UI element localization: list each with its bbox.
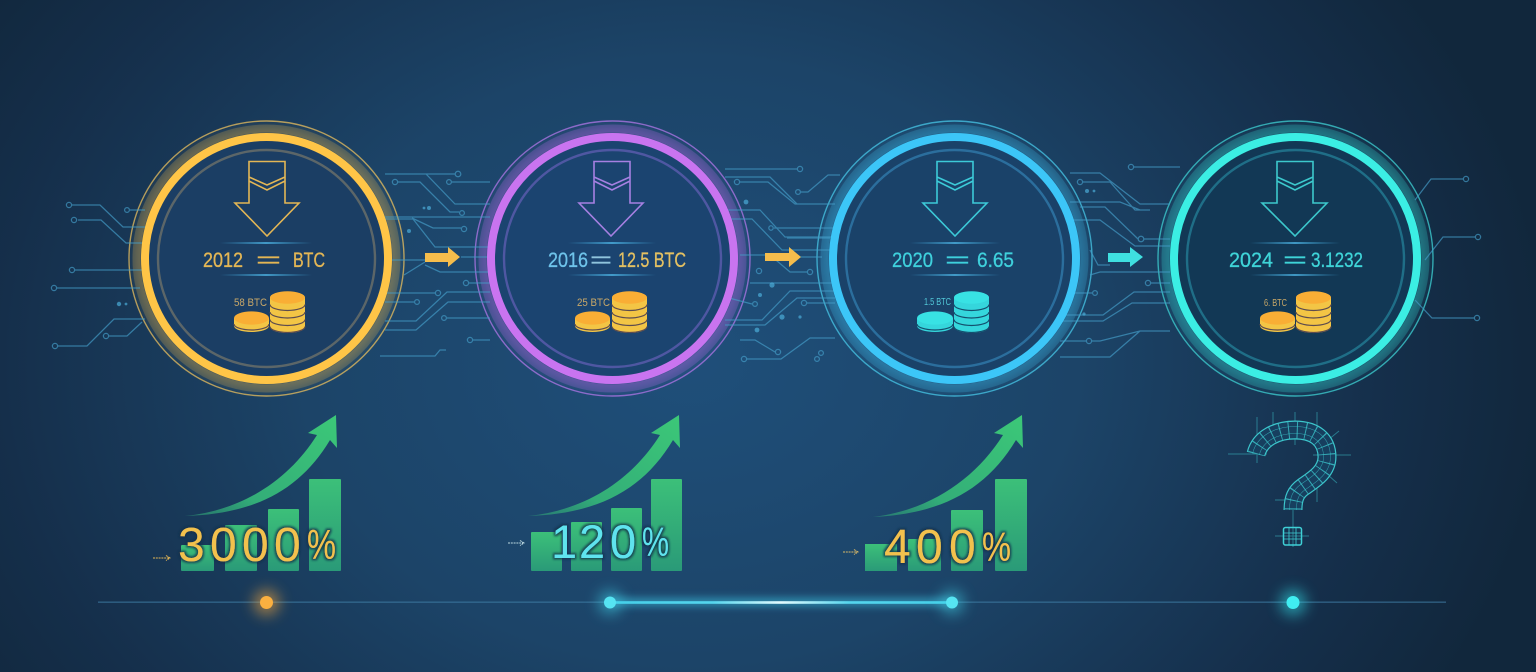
- label: 2016 = 12.5 BTC: =: [590, 249, 612, 272]
- marker: 2024: [1280, 590, 1306, 616]
- panel: 2016 halving circle: [491, 137, 734, 380]
- circuit glow dots: [117, 189, 1095, 332]
- label: 2024 = 3.1232: 2024: [1229, 249, 1273, 272]
- divider: [910, 243, 1000, 275]
- label: 2012 = BTC: BTC: [293, 249, 325, 272]
- chart: 2020 growth: [843, 415, 1027, 574]
- icon: coins: [575, 291, 647, 333]
- panel: 2020 halving circle rings: [817, 121, 1092, 396]
- label: 2016 = 12.5 BTC: 2016: [548, 249, 588, 272]
- icon: wireframe question mark: [1228, 412, 1351, 547]
- value: 400%: %: [982, 524, 1011, 570]
- icon: halving arrow: [923, 162, 987, 236]
- panel: 2024 halving circle: [1174, 137, 1417, 380]
- label: 25 BTC: 25 BTC: [577, 297, 610, 309]
- label: 2020 = 6.65: 6.65: [977, 249, 1014, 272]
- growth arrow: [185, 415, 337, 516]
- label: 6. BTC: 6. BTC: [1264, 297, 1287, 309]
- marker: 2016: [598, 590, 622, 614]
- icon: coins: [234, 291, 305, 333]
- label: 2024 = 3.1232: =: [1283, 249, 1307, 272]
- label: 1.5 BTC: 1.5 BTC: [924, 297, 951, 308]
- label: 2016 = 12.5 BTC: 12.5 BTC: [618, 249, 686, 272]
- bars: [865, 479, 1027, 571]
- label: 2012 = BTC: 2012: [203, 249, 243, 272]
- small arrow: [843, 550, 858, 554]
- panel: 2016 halving circle rings: [475, 121, 750, 396]
- bars: [181, 479, 341, 571]
- icon: coins: [1260, 291, 1331, 333]
- value: 120%: %: [642, 519, 669, 565]
- icon: halving arrow: [579, 162, 643, 236]
- label: 58 BTC: 58 BTC: [234, 297, 267, 309]
- small arrow: [508, 540, 524, 546]
- value: 3000%: %: [307, 521, 336, 568]
- panel: 2012 halving circle rings: [129, 121, 404, 396]
- icon: halving arrow: [1262, 162, 1327, 236]
- small arrow: [153, 556, 170, 560]
- value: 3000%: 3000: [178, 519, 301, 572]
- panel: 2020 halving circle: [833, 137, 1076, 380]
- divider: [568, 243, 656, 275]
- growth arrow: [873, 415, 1023, 517]
- label: 2012 = BTC: =: [256, 249, 281, 272]
- panel: 2012 halving circle: [145, 137, 388, 380]
- marker: 2012: [254, 590, 280, 616]
- chart: 2016 growth: [508, 415, 682, 571]
- icon: halving arrow: [235, 162, 299, 236]
- circuit traces: [51, 164, 1481, 362]
- label: 2020 = 6.65: 2020: [892, 249, 933, 272]
- arrow: 2016 to 2020: [765, 247, 801, 267]
- label: 2024 = 3.1232: 3.1232: [1311, 249, 1363, 272]
- panel: 2024 halving circle rings: [1158, 121, 1433, 396]
- growth arrow: [528, 415, 680, 516]
- arrow: 2012 to 2016: [425, 247, 460, 267]
- label: 2020 = 6.65: =: [945, 249, 970, 272]
- value: 400%: 400: [884, 521, 976, 574]
- chart: 2012 growth: [153, 415, 341, 572]
- bars: [531, 479, 682, 571]
- value: 120%: 120: [551, 515, 636, 568]
- timeline: [98, 590, 1446, 616]
- marker: 2020: [940, 590, 964, 614]
- icon: coins: [917, 291, 989, 333]
- divider: [1250, 243, 1340, 275]
- divider: [220, 243, 312, 275]
- arrow: 2020 to 2024: [1108, 247, 1143, 267]
